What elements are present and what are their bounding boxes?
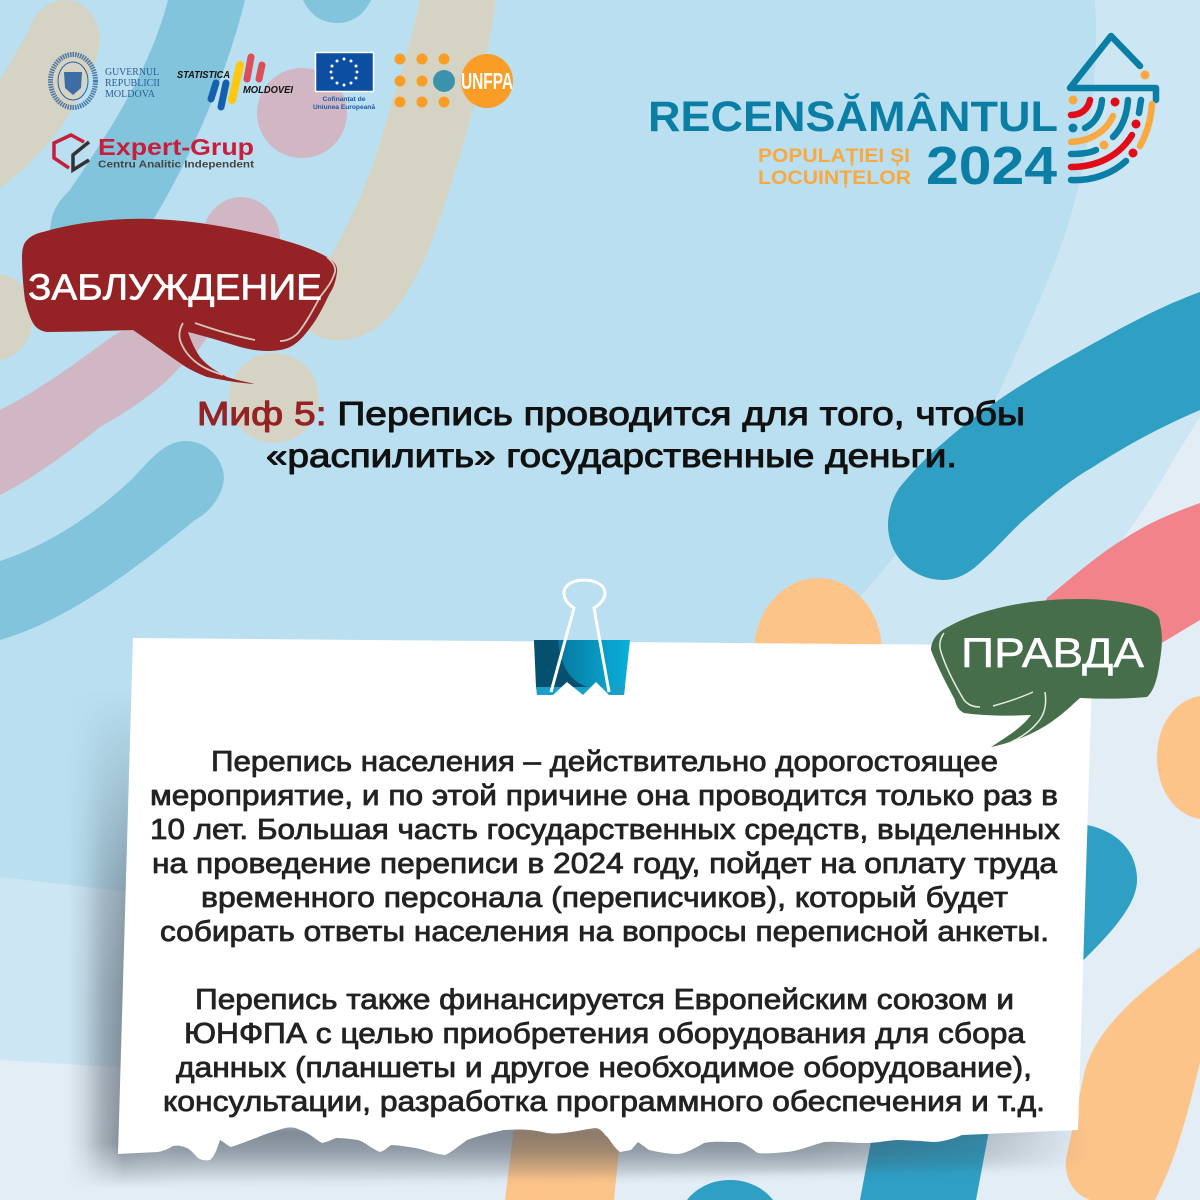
logos: partners — [50, 52, 513, 170]
logo: government of Moldova: REPUBLICII — [105, 78, 160, 89]
logo: European Union — [313, 52, 375, 111]
decorative shapes top left — [0, 0, 496, 640]
logo: Statistica Moldovei: MOLDOVEI — [243, 85, 293, 96]
logo: European Union: Uniunea Europeană — [313, 104, 375, 111]
decorative shapes right and bottom — [505, 292, 1200, 1200]
paragraph 1: на проведение переписи в 2024 году, пойдет на оплату труда — [152, 848, 1058, 880]
paper note — [118, 638, 1093, 1160]
myth heading: Миф 5: Перепись проводится для того, чтобы — [197, 395, 1025, 432]
paper shadow — [68, 690, 1090, 1188]
paragraph 1: мероприятие, и по этой причине она проводится только раз в — [150, 780, 1058, 812]
speech bubble: myth — [22, 219, 337, 384]
logo: Recensământul 2024 — [648, 36, 1156, 196]
logo: UNFPA: UNFPA — [461, 68, 513, 94]
logo: government of Moldova: GUVERNUL — [105, 67, 159, 78]
paragraph 2: консультации, разработка программного обеспечения и т.д. — [163, 1086, 1045, 1118]
logo: Recensământul 2024: POPULAȚIEI ȘI — [758, 146, 910, 167]
speech bubble: truth — [931, 599, 1162, 747]
bubble label: ЗАБЛУЖДЕНИЕ — [28, 266, 322, 308]
paragraph 1: собирать ответы населения на вопросы переписной анкеты. — [160, 916, 1049, 948]
paragraph 2: данных (планшеты и другое необходимое оборудование), — [176, 1052, 1032, 1084]
logo: Recensământul 2024: 2024 — [926, 136, 1057, 196]
body text — [150, 746, 1061, 1118]
paragraph 2 — [163, 984, 1045, 1118]
logo: government of Moldova — [50, 54, 160, 108]
myth heading — [197, 395, 1025, 474]
icon: binder clip — [534, 580, 630, 695]
paragraph 2: Перепись также финансируется Европейским союзом и — [195, 984, 1014, 1016]
logo: European Union: Cofinanțat de — [322, 96, 366, 103]
logo: Statistica Moldovei: STATISTICA — [177, 70, 230, 81]
paragraph 1: 10 лет. Большая часть государственных средств, выделенных — [150, 814, 1061, 846]
paragraph 1: Перепись населения – действительно дорогостоящее — [211, 746, 998, 778]
icon: house with fingerprint — [1068, 36, 1156, 180]
logo: Recensământul 2024: LOCUINȚELOR — [758, 168, 911, 189]
logo: UNFPA — [394, 54, 513, 108]
logo: Expert-Grup: Expert-Grup — [98, 134, 254, 160]
paragraph 1: временного персонала (переписчиков), который будет — [201, 882, 1008, 914]
bubble label: ПРАВДА — [961, 629, 1144, 676]
paragraph 1 — [150, 746, 1061, 948]
myth heading: «распилить» государственные деньги. — [266, 437, 957, 474]
logo: Expert-Grup: Centru Analitic Independent — [98, 158, 255, 170]
logo: Expert-Grup — [54, 134, 255, 170]
logo: Statistica Moldovei — [177, 57, 293, 107]
logo: Recensământul 2024: RECENSĂMÂNTUL — [648, 92, 1058, 141]
logo: government of Moldova: MOLDOVA — [105, 89, 155, 100]
paragraph 2: ЮНФПА с целью приобретения оборудования для сбора — [184, 1018, 1026, 1050]
